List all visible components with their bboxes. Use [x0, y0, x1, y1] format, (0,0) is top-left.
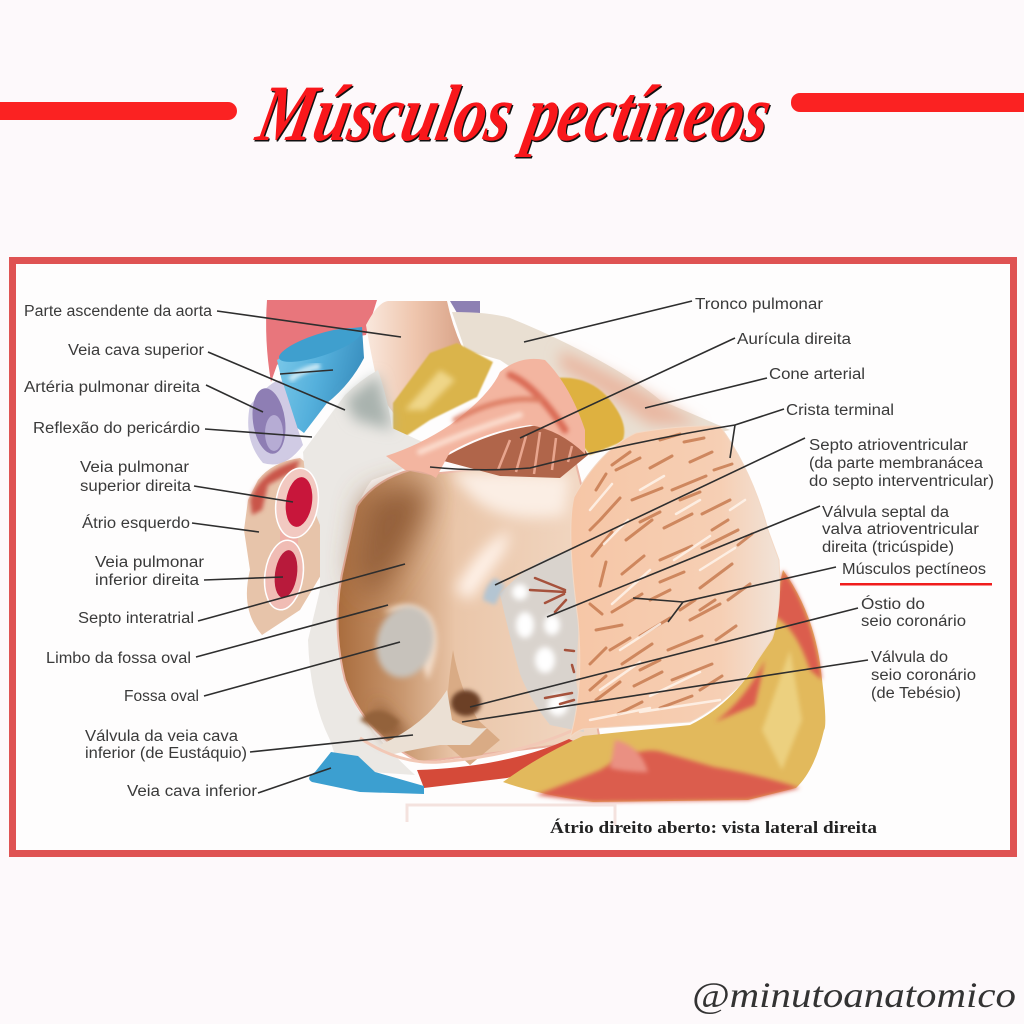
pale highlights [590, 476, 745, 720]
right labels: (de Tebésio) [871, 685, 961, 702]
faint caption box [407, 805, 615, 826]
bottom fat and ventricle [503, 570, 825, 802]
red band under atrium [417, 739, 582, 788]
right labels: Aurícula direita [737, 331, 851, 348]
right labels: Músculos pectíneos [842, 561, 986, 578]
right labels: direita (tricúspide) [822, 539, 954, 556]
title: Músculos pectíneos [250, 71, 780, 159]
auricle opening [440, 425, 588, 478]
left labels: Veia pulmonar [95, 554, 204, 571]
right labels: Crista terminal [786, 402, 894, 419]
right labels: Tronco pulmonar [695, 296, 823, 313]
inferior vena cava [309, 752, 424, 794]
ascending aorta [366, 301, 462, 415]
right labels: Válvula septal da [822, 504, 949, 521]
white valve leaflet [483, 550, 584, 732]
purple vessel behind aorta [450, 301, 480, 318]
author handle: @minutoanatomico [692, 975, 1016, 1015]
right labels: Septo atrioventricular [809, 437, 968, 454]
aortic yellow fat [393, 343, 493, 438]
left labels: Veia cava inferior [127, 783, 257, 800]
highlight underline [840, 583, 992, 586]
pericardial reflection band [303, 370, 440, 775]
right labels [695, 296, 994, 702]
left labels: Septo interatrial [78, 610, 194, 627]
left labels: Átrio esquerdo [82, 515, 190, 532]
left labels: Veia pulmonar [80, 459, 189, 476]
left labels: Veia cava superior [68, 342, 204, 359]
back red great vessel [266, 300, 377, 382]
pulmonary trunk [452, 312, 730, 450]
left title bar [0, 102, 237, 120]
left labels: inferior (de Eustáquio) [85, 745, 247, 762]
left atrium [244, 458, 330, 635]
left labels: Válvula da veia cava [85, 728, 238, 745]
right labels: seio coronário [861, 613, 966, 630]
coronary sinus ostium [360, 650, 500, 765]
heart illustration [244, 300, 825, 826]
right labels: valva atrioventricular [822, 521, 979, 538]
left labels: Reflexão do pericárdio [33, 420, 200, 437]
right labels: Óstio do [861, 596, 925, 613]
left labels: Parte ascendente da aorta [24, 303, 212, 320]
shadow on interior [355, 487, 430, 600]
superior vena cava [277, 327, 364, 433]
leader lines [192, 301, 868, 793]
right labels: Válvula do [871, 649, 948, 666]
right labels: (da parte membranácea [809, 455, 983, 472]
atrial interior [338, 460, 600, 762]
pectinate muscle flap [570, 426, 780, 738]
framed panel [12, 260, 1014, 854]
right pulmonary artery [248, 380, 303, 465]
left labels [24, 303, 257, 800]
left labels: inferior direita [95, 572, 199, 589]
fossa ovalis [369, 600, 441, 684]
right labels: Cone arterial [769, 366, 865, 383]
left labels: superior direita [80, 478, 191, 495]
right title bar [791, 93, 1024, 112]
pectinate streaks [590, 434, 752, 714]
auricular flap [386, 359, 585, 478]
right labels: do septo interventricular) [809, 473, 994, 490]
title: Músculos pectíneos [249, 70, 779, 158]
pulmonary vein rings [260, 465, 323, 612]
left labels: Limbo da fossa oval [46, 650, 191, 667]
right labels: seio coronário [871, 667, 976, 684]
left labels: Artéria pulmonar direita [24, 379, 200, 396]
left labels: Fossa oval [124, 688, 199, 705]
figure caption: Átrio direito aberto: vista lateral direita [550, 818, 878, 837]
right yellow fat [555, 378, 624, 455]
